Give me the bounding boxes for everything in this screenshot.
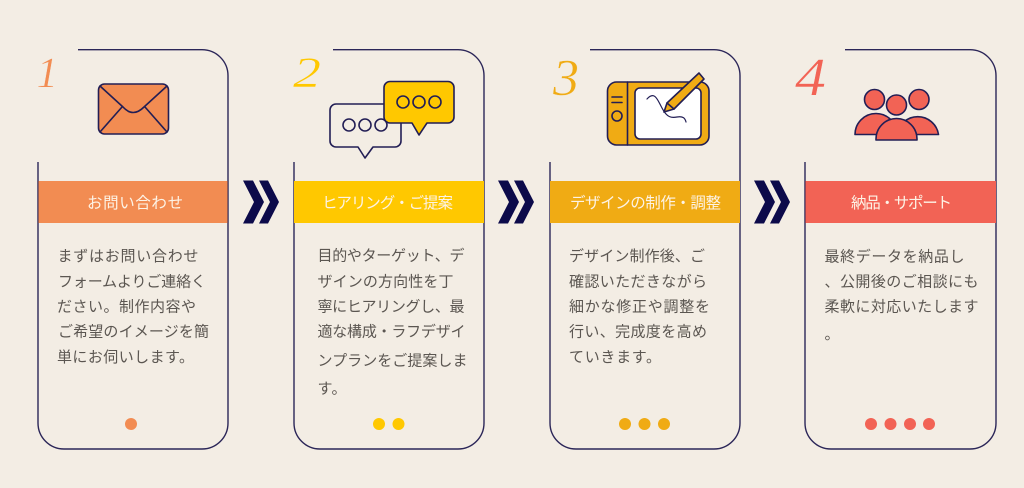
description text: 目的やターゲット、デ <box>318 246 464 264</box>
arrow: step 2 to 3 <box>498 180 534 224</box>
progress dots <box>865 418 935 430</box>
panel: step 4 <box>795 47 996 449</box>
heading text: お問い合わせ <box>87 194 183 212</box>
panel: step 2 <box>293 50 484 449</box>
progress dots <box>619 418 670 430</box>
heading band <box>550 181 740 223</box>
description text: 最終データを納品し <box>824 248 964 266</box>
panel: step 1 <box>36 50 228 449</box>
description text: ご希望のイメージを簡 <box>58 322 209 340</box>
heading text: ヒアリング・ご提案 <box>322 194 453 212</box>
description text: ンプランをご提案しま <box>318 352 468 370</box>
heading text: デザインの制作・調整 <box>570 193 721 212</box>
description text <box>318 246 468 398</box>
progress dots <box>125 418 137 430</box>
step number 2: 2 <box>293 50 321 97</box>
heading band <box>806 181 996 223</box>
description text <box>824 248 978 343</box>
arrow: step 3 to 4 <box>754 180 790 224</box>
step number 3: 3 <box>552 50 579 107</box>
description text: ださい。制作内容や <box>57 298 196 316</box>
description text: ザインの方向性を丁 <box>318 274 454 290</box>
description text: デザイン制作後、ご <box>569 247 705 265</box>
icon: envelope <box>98 84 168 134</box>
description text: 行い、完成度を高め <box>569 324 707 340</box>
step number 1: 1 <box>36 50 58 97</box>
description text: 確認いただきながら <box>569 274 707 290</box>
heading text: 納品・サポート <box>851 194 952 212</box>
arrow: step 1 to 2 <box>243 180 279 224</box>
panel: step 3 <box>550 50 740 449</box>
step number 4: 4 <box>795 47 826 107</box>
card outline <box>550 50 740 449</box>
card outline <box>805 50 996 449</box>
description text: 。 <box>824 326 840 343</box>
icon: speech bubbles <box>330 82 454 158</box>
description text: 寧にヒアリングし、最 <box>318 298 464 316</box>
description text: す。 <box>318 380 346 398</box>
description text: 柔軟に対応いたします <box>824 298 978 316</box>
description text: 単にお伺いします。 <box>57 349 194 366</box>
description text: ていきます。 <box>569 349 661 366</box>
progress dots <box>373 418 404 430</box>
description text: まずはお問い合わせ <box>58 248 198 265</box>
icon: pen tablet <box>608 73 709 145</box>
description text <box>57 248 209 366</box>
description text: フォームよりご連絡く <box>58 274 206 290</box>
card outline <box>294 50 484 449</box>
icon: three people <box>855 90 938 140</box>
card outline <box>38 50 228 449</box>
description text <box>569 247 710 366</box>
description text: 細かな修正や調整を <box>569 298 710 316</box>
heading band <box>38 181 228 223</box>
description text: 、公開後のご相談にも <box>824 274 978 290</box>
description text: 適な構成・ラフデザイ <box>318 322 466 340</box>
heading band <box>294 181 484 223</box>
